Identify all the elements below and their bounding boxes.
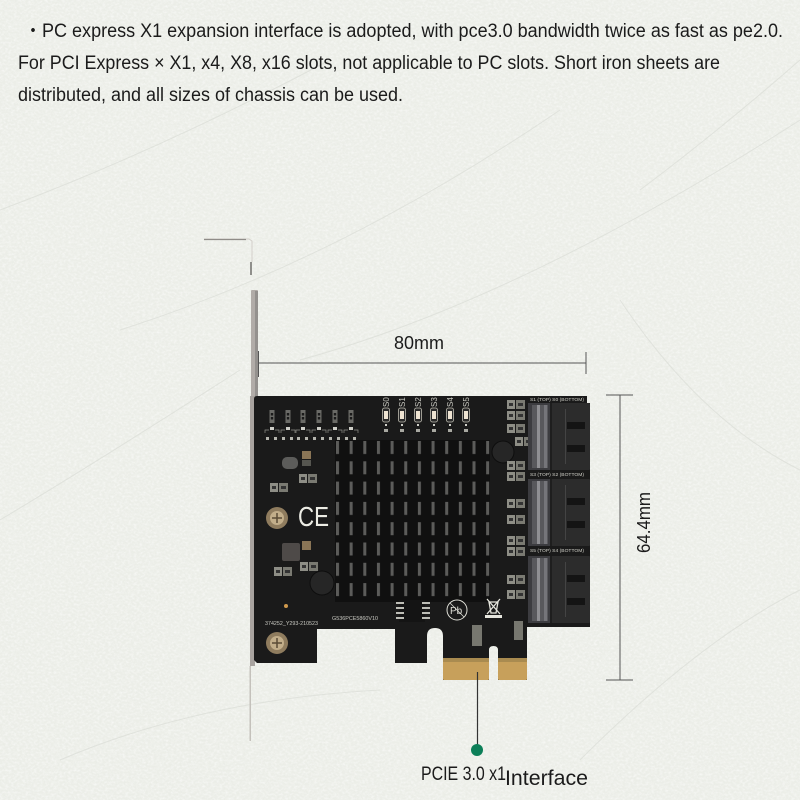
inductors and small parts [270, 451, 318, 576]
CE mark: CE [298, 501, 329, 532]
power indicators row [265, 410, 358, 440]
port LEDs S0 to S5: S0 [382, 397, 391, 407]
mounting screw top [266, 507, 288, 529]
capacitor right [492, 441, 514, 463]
port LEDs S0 to S5 [382, 397, 471, 432]
lead-free symbol [447, 600, 467, 620]
gold edge connector [443, 658, 527, 680]
lead-free symbol: Pb [450, 606, 463, 617]
connector labels: S5 (TOP) S4 (BOTTOM) [530, 548, 585, 553]
board outline [254, 396, 590, 680]
port LEDs S0 to S5: S5 [462, 397, 471, 407]
SATA connector 1 [528, 403, 590, 470]
connector labels [530, 397, 585, 553]
width label: 80mm [394, 333, 444, 353]
connector labels: S3 (TOP) S2 (BOTTOM) [530, 472, 585, 477]
heatsink [335, 440, 490, 602]
orange marker [284, 604, 288, 608]
width dimension 80mm [258, 333, 586, 377]
callout label part one: PCIE 3.0 x1 [421, 764, 506, 785]
connector labels: S1 (TOP) S0 (BOTTOM) [530, 397, 585, 402]
SATA connector 3 [528, 556, 590, 623]
height label: 64.4mm [633, 492, 654, 553]
resistor arrays [472, 400, 533, 646]
metal bracket [204, 239, 258, 741]
circuit board [254, 396, 590, 680]
text line 3: distributed, and all sizes of chassis can be used. [18, 85, 403, 106]
description text block [18, 21, 783, 106]
height dimension 64.4mm [606, 395, 654, 680]
SATA connector 2 [528, 479, 590, 546]
text line 2: For PCI Express × X1, x4, X8, x16 slots, not applicable to PC slots. Short iron sheets are [18, 53, 720, 74]
recycling bin symbol [485, 599, 502, 618]
controller chip [396, 600, 430, 622]
port LEDs S0 to S5: S2 [414, 397, 423, 407]
model code: G536PCE5860V10 [332, 616, 378, 622]
port LEDs S0 to S5: S4 [446, 397, 455, 407]
port LEDs S0 to S5: S1 [398, 397, 407, 407]
callout label part two: Interface [505, 767, 588, 790]
port LEDs S0 to S5: S3 [430, 397, 439, 407]
serial code: 374252_Y293-210523 [265, 621, 318, 627]
mounting screw bottom [266, 632, 288, 654]
green marker dot [471, 744, 483, 756]
PCIe interface callout [421, 672, 588, 790]
capacitor left [310, 571, 334, 595]
